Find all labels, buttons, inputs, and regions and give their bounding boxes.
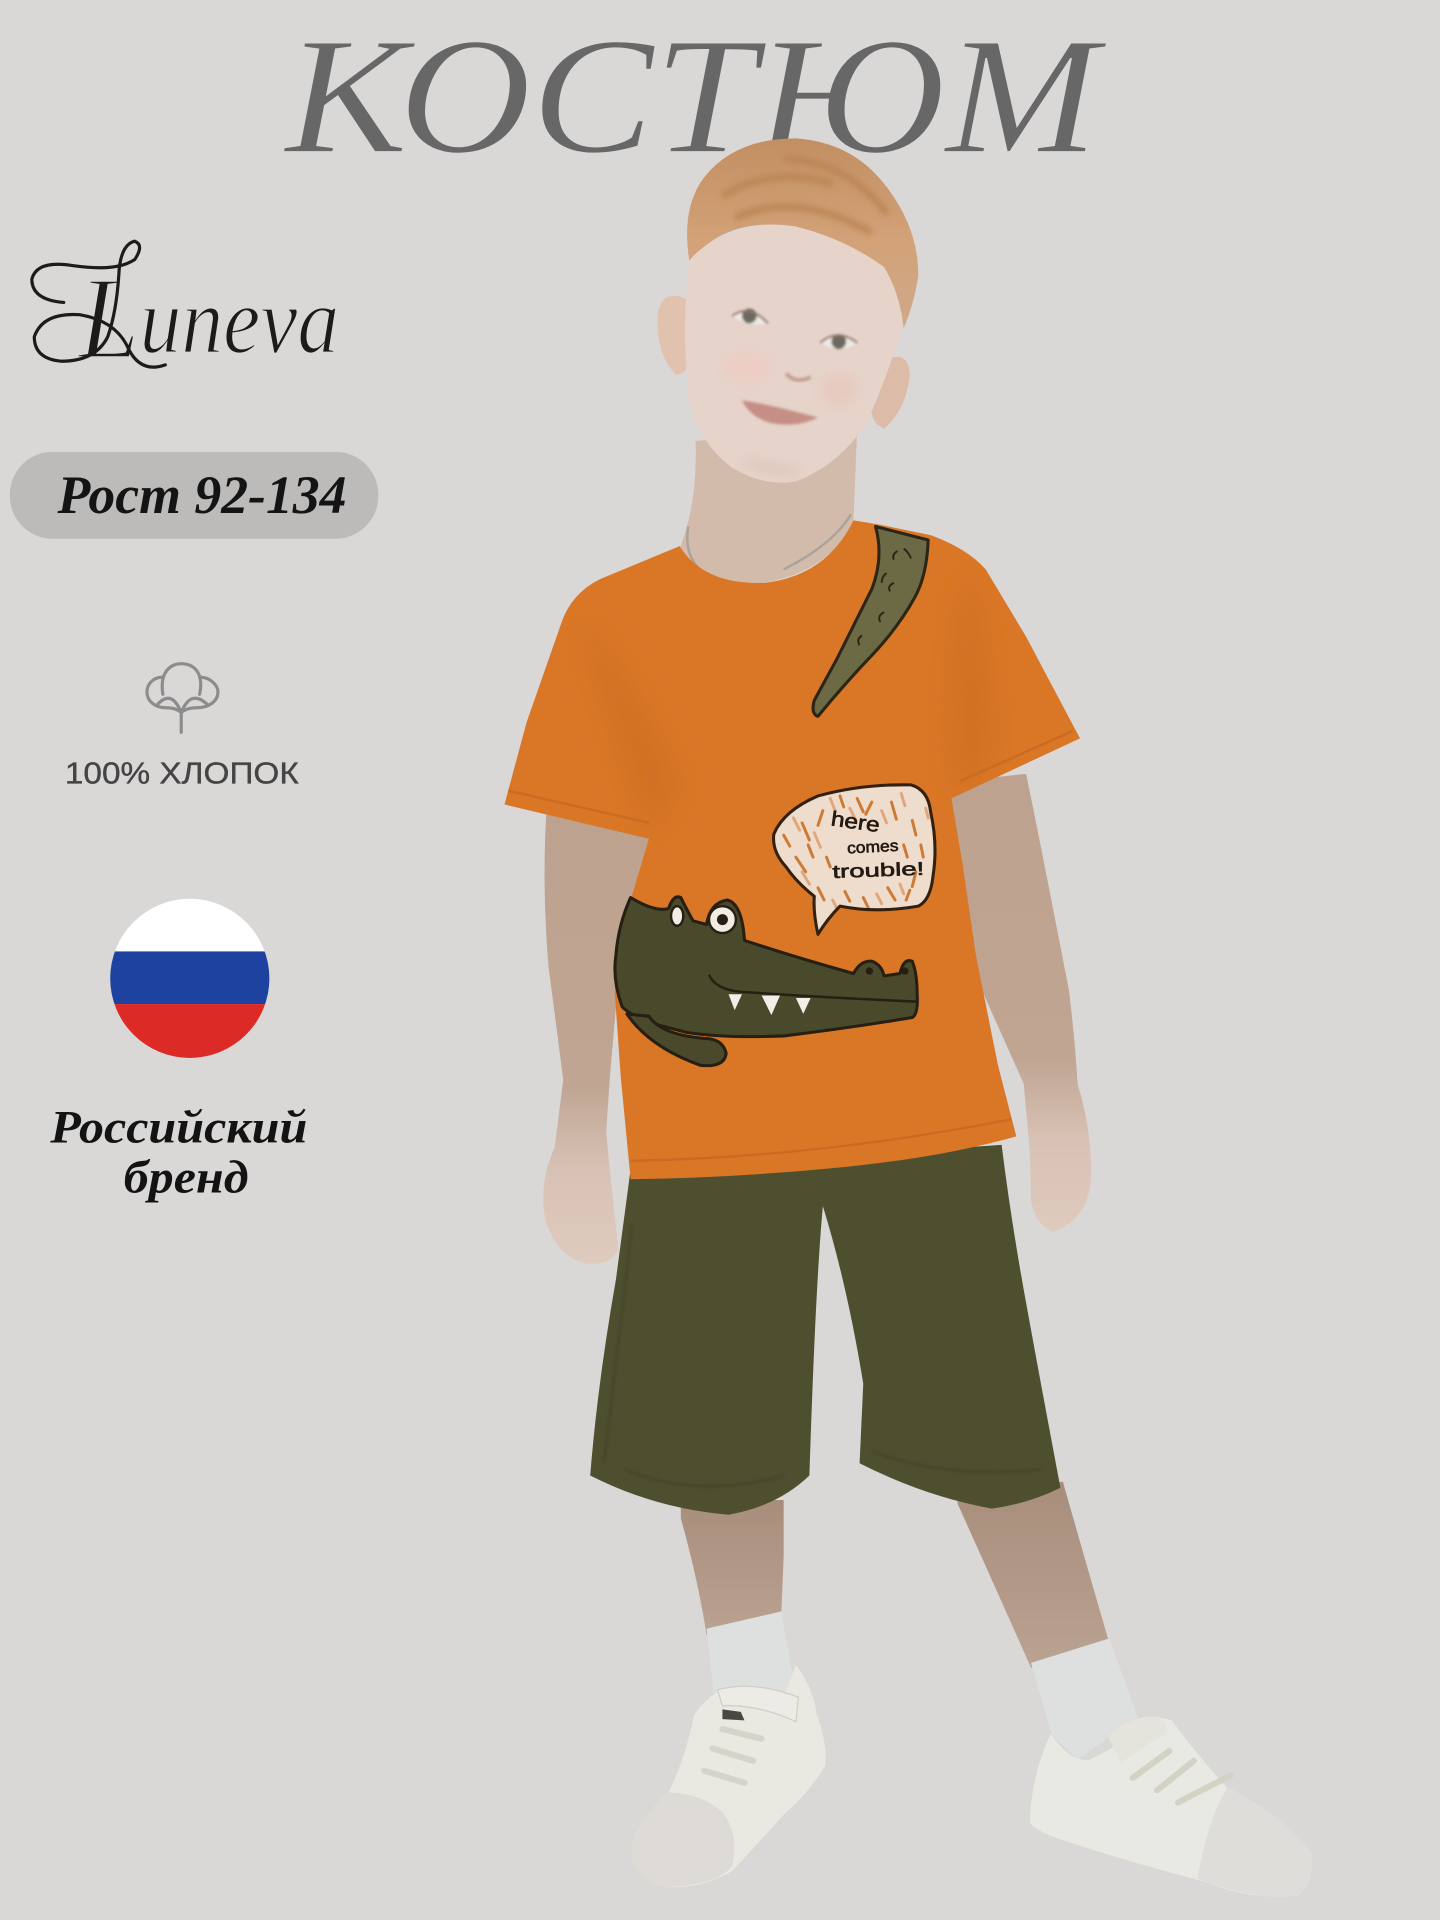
icon: russian flag: [108, 896, 272, 1060]
left ear: [657, 296, 692, 375]
crocodile teeth: [729, 994, 811, 1015]
legs: [681, 1482, 1109, 1668]
t-shirt: [504, 520, 1080, 1179]
brand origin text: бренд: [124, 1153, 249, 1204]
boy figure: [504, 138, 1312, 1897]
brand logo: Luneva: [32, 241, 339, 384]
crocodile eyes: [671, 906, 909, 975]
bubble text: [830, 807, 925, 882]
necklace: [687, 514, 851, 573]
eyes: [732, 309, 857, 349]
bubble text: comes: [847, 838, 899, 857]
brand origin text: Российский: [49, 1102, 307, 1153]
speech bubble print: [774, 785, 935, 934]
face shading: [722, 350, 858, 474]
title: КОСТЮМ: [283, 5, 1107, 189]
icon: cotton boll: [147, 664, 218, 732]
bubble text: here: [830, 807, 881, 837]
cotton label: 100% ХЛОПОК: [65, 757, 299, 791]
crocodile mouth line: [709, 975, 917, 1002]
left arm and hand: [543, 796, 661, 1264]
hair: [687, 138, 918, 328]
crocodile arm: [627, 1014, 726, 1066]
neck: [680, 429, 857, 583]
face: [685, 222, 909, 483]
left sneaker: [632, 1665, 826, 1887]
shirt folds: [504, 563, 1073, 1161]
bubble text: trouble!: [832, 858, 925, 882]
shorts: [590, 1145, 1060, 1515]
height pill: Рост 92-134: [57, 465, 347, 525]
height pill: [10, 452, 378, 539]
crocodile tail print: [813, 527, 928, 716]
brand logo: Luneva: uneva: [140, 268, 339, 374]
brand origin text: [49, 1102, 307, 1204]
brand logo: Luneva: L: [76, 254, 140, 384]
right sneaker: [1030, 1716, 1312, 1897]
socks: [707, 1611, 1138, 1760]
crocodile print: [615, 897, 917, 1066]
right ear: [871, 357, 910, 429]
nose: [786, 373, 811, 380]
mouth: [742, 400, 818, 425]
right arm and hand: [931, 774, 1091, 1232]
